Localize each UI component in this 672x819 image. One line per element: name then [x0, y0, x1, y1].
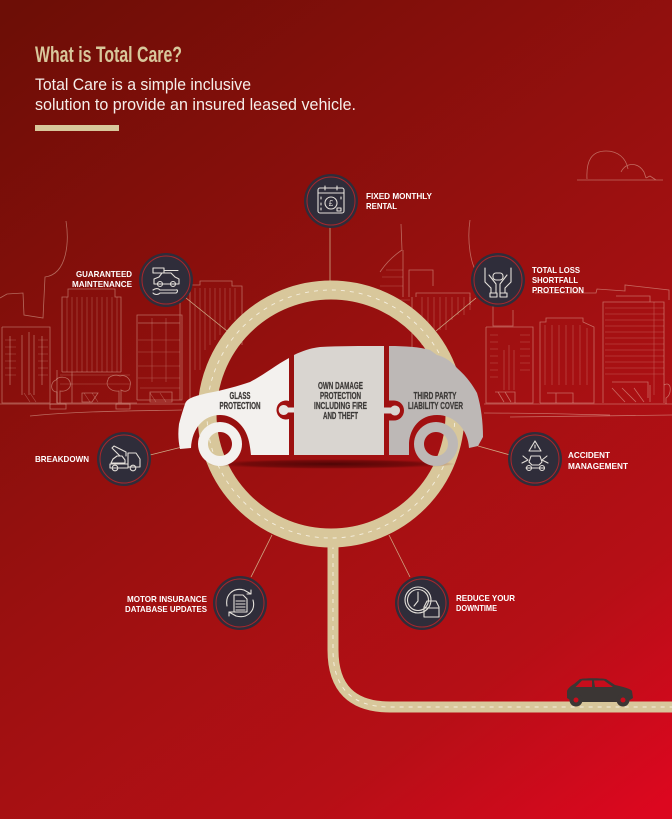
icon: tow truck — [97, 432, 151, 486]
item: motor insurance database updates — [125, 576, 267, 630]
label: ACCIDENT — [568, 450, 611, 460]
label: SHORTFALL — [532, 275, 578, 285]
puzzle tab right — [384, 406, 400, 416]
left buildings — [0, 221, 242, 403]
title underline bar — [35, 125, 119, 131]
small car on road — [567, 678, 633, 706]
puzzle tab left — [279, 405, 294, 415]
icon: car and tools — [139, 253, 193, 307]
heading block — [35, 42, 356, 131]
own damage label: AND THEFT — [323, 411, 358, 422]
label: MOTOR INSURANCE — [127, 594, 207, 604]
label: MAINTENANCE — [72, 279, 132, 289]
icon: warning and cars — [508, 432, 562, 486]
label: GUARANTEED — [76, 269, 132, 279]
intro text: solution to provide an insured leased vehicle. — [35, 96, 356, 114]
item: reduce your downtime — [395, 576, 515, 630]
title: What is Total Care? — [35, 42, 182, 67]
own damage label: INCLUDING FIRE — [314, 401, 367, 412]
right building details — [380, 270, 664, 395]
label: REDUCE YOUR — [456, 593, 515, 603]
car shadow — [206, 459, 456, 469]
item: accident management — [508, 432, 629, 486]
car piece: third party — [389, 346, 483, 466]
item: fixed monthly rental — [304, 174, 432, 228]
road dashes — [333, 545, 672, 707]
right ground details — [495, 384, 670, 404]
ring dashes — [207, 290, 455, 538]
left building details — [5, 288, 235, 402]
wheel left — [198, 422, 242, 466]
icon: clock and car — [395, 576, 449, 630]
label: MANAGEMENT — [568, 461, 629, 471]
right buildings — [380, 220, 669, 403]
icon: hands holding car — [471, 253, 525, 307]
road to car — [333, 540, 672, 707]
icon: document with cycle arrows — [213, 576, 267, 630]
item: guaranteed maintenance — [72, 253, 193, 307]
own damage label: OWN DAMAGE — [318, 381, 363, 392]
label: FIXED MONTHLY — [366, 191, 432, 201]
puzzle socket left — [276, 400, 289, 420]
label: RENTAL — [366, 201, 397, 211]
city skyline sketch — [0, 151, 672, 417]
car piece: glass protection — [178, 358, 289, 466]
label: BREAKDOWN — [35, 454, 89, 464]
connector lines — [150, 227, 510, 577]
wheel right — [414, 422, 458, 466]
item: total loss shortfall protection — [471, 253, 584, 307]
ring — [207, 290, 455, 538]
label: DATABASE UPDATES — [125, 604, 207, 614]
road ring and road to car — [207, 290, 672, 707]
label: PROTECTION — [532, 285, 584, 295]
third party label: LIABILITY COVER — [408, 401, 463, 412]
glass protection label: PROTECTION — [220, 401, 260, 412]
trees left — [50, 375, 130, 409]
item: breakdown — [35, 432, 151, 486]
car piece: own damage — [294, 346, 384, 455]
puzzle car — [178, 346, 483, 466]
intro text: Total Care is a simple inclusive — [35, 76, 251, 94]
glass protection label: GLASS — [230, 391, 251, 402]
puzzle socket right — [389, 400, 404, 420]
ground lines — [0, 404, 672, 417]
label: TOTAL LOSS — [532, 265, 580, 275]
cloud — [577, 151, 663, 180]
label: DOWNTIME — [456, 603, 497, 613]
third party label: THIRD PARTY — [414, 391, 457, 402]
icon: calendar: £ — [329, 199, 334, 208]
own damage label: PROTECTION — [320, 391, 361, 402]
